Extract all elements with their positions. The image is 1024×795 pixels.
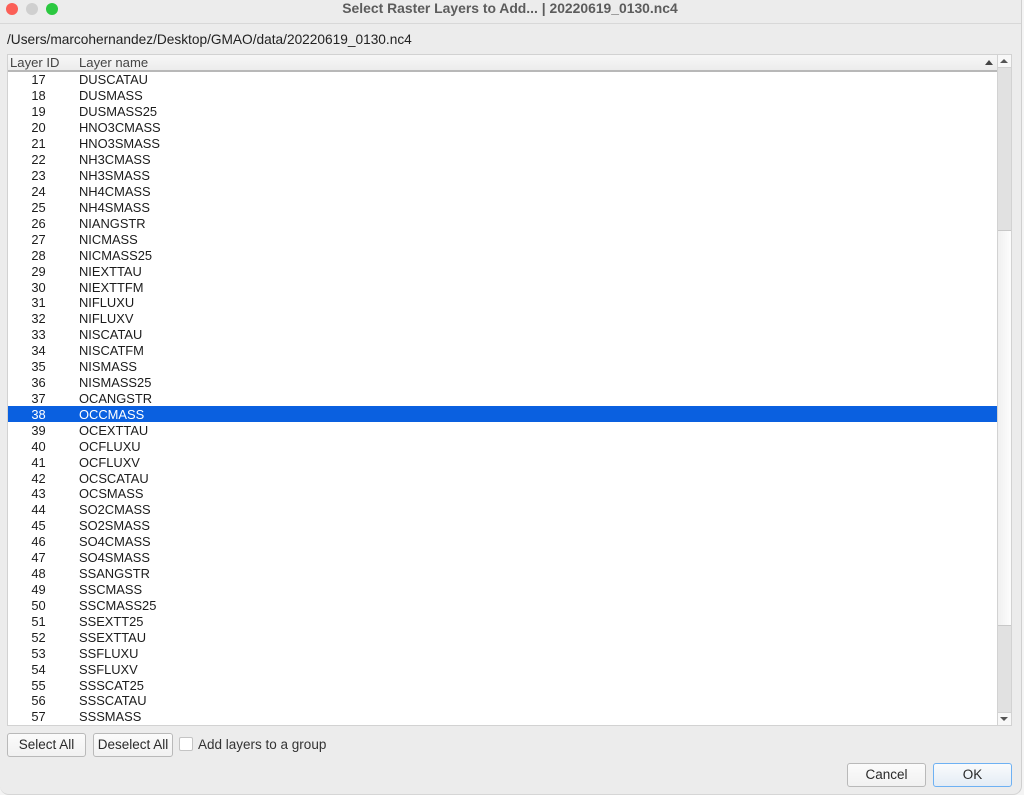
window title: Select Raster Layers to Add... | 20220619_0130.nc4	[342, 0, 678, 16]
table rows: 50	[31, 598, 46, 613]
table rows: 53	[31, 646, 46, 661]
table rows: 32	[31, 311, 46, 326]
table rows: 51	[31, 614, 46, 629]
table rows: DUSCATAU	[79, 72, 148, 87]
table rows: NH3CMASS	[79, 152, 151, 167]
table rows: 45	[31, 518, 46, 533]
table rows: NISMASS25	[79, 375, 151, 390]
table rows: 27	[31, 232, 46, 247]
column: Layer name: Layer name	[79, 55, 148, 70]
table rows: NIEXTTAU	[79, 264, 142, 279]
table rows: 17	[31, 72, 46, 87]
table rows: NISCATFM	[79, 343, 144, 358]
table rows: NH3SMASS	[79, 168, 150, 183]
button: OK	[933, 763, 1012, 787]
table rows: NIANGSTR	[79, 216, 146, 231]
table rows: SO4SMASS	[79, 550, 150, 565]
table rows: 28	[31, 248, 46, 263]
table rows: 52	[31, 630, 46, 645]
sort arrow	[985, 60, 993, 65]
table rows: 47	[31, 550, 46, 565]
table rows: 19	[31, 104, 46, 119]
table rows: 54	[31, 662, 46, 677]
window control: zoom	[46, 3, 58, 15]
table rows: SSEXTTAU	[79, 630, 146, 645]
checkbox	[179, 737, 193, 751]
table rows: 40	[31, 439, 46, 454]
button: OK: OK	[963, 767, 982, 782]
table rows: 49	[31, 582, 46, 597]
table rows: 37	[31, 391, 46, 406]
selected row: 38	[31, 407, 46, 422]
button: Deselect All: Deselect All	[98, 737, 168, 752]
table rows: SSCMASS25	[79, 598, 156, 613]
table rows: 48	[31, 566, 46, 581]
table rows: NH4SMASS	[79, 200, 150, 215]
table rows: 57	[31, 709, 46, 724]
table rows: 35	[31, 359, 46, 374]
table rows: NIEXTTFM	[79, 280, 143, 295]
checkbox label: Add layers to a group	[198, 737, 326, 752]
table rows: HNO3SMASS	[79, 136, 160, 151]
table rows: 24	[31, 184, 46, 199]
table rows: 21	[31, 136, 46, 151]
column: Layer ID: Layer ID	[10, 55, 60, 70]
window control: minimize	[26, 3, 38, 15]
button: Select All	[7, 733, 86, 757]
table rows: SSSMASS	[79, 709, 141, 724]
table rows: 36	[31, 375, 46, 390]
scroll up button	[998, 55, 1011, 68]
table rows: SSSCAT25	[79, 678, 144, 693]
table rows: SSANGSTR	[79, 566, 150, 581]
table rows: SO2SMASS	[79, 518, 150, 533]
table rows: SSEXTT25	[79, 614, 143, 629]
table rows: OCFLUXU	[79, 439, 141, 454]
table rows: SSFLUXU	[79, 646, 138, 661]
table rows: 56	[31, 693, 46, 708]
title bar	[0, 0, 1021, 24]
window control: close	[6, 3, 18, 15]
table rows: 25	[31, 200, 46, 215]
table rows: OCANGSTR	[79, 391, 152, 406]
table rows: 31	[31, 295, 46, 310]
table rows: SSSCATAU	[79, 693, 147, 708]
table rows: NH4CMASS	[79, 184, 151, 199]
table rows: 18	[31, 88, 46, 103]
scroll down button	[998, 712, 1011, 725]
table rows: 43	[31, 486, 46, 501]
selected row	[8, 406, 997, 422]
button: Cancel: Cancel	[865, 767, 908, 782]
table rows: OCEXTTAU	[79, 423, 148, 438]
table rows: 22	[31, 152, 46, 167]
table header	[8, 55, 997, 72]
table rows: OCFLUXV	[79, 455, 140, 470]
table rows: SO2CMASS	[79, 502, 151, 517]
table rows: NIFLUXV	[79, 311, 133, 326]
table rows: 34	[31, 343, 46, 358]
vertical scrollbar	[997, 55, 1011, 725]
file path: /Users/marcohernandez/Desktop/GMAO/data/20220619_0130.nc4	[7, 32, 412, 47]
table rows: NIFLUXU	[79, 295, 134, 310]
table rows: 46	[31, 534, 46, 549]
table rows: DUSMASS	[79, 88, 143, 103]
table rows: 39	[31, 423, 46, 438]
button: Cancel	[847, 763, 926, 787]
button: Select All: Select All	[19, 737, 74, 752]
selected row: OCCMASS	[79, 407, 144, 422]
table rows: 30	[31, 280, 46, 295]
table rows: 20	[31, 120, 46, 135]
table rows: 23	[31, 168, 46, 183]
table rows: 29	[31, 264, 46, 279]
table rows: NISMASS	[79, 359, 137, 374]
button: Deselect All	[93, 733, 173, 757]
table rows: NICMASS25	[79, 248, 152, 263]
table rows: 55	[31, 678, 46, 693]
table rows: OCSMASS	[79, 486, 143, 501]
table rows: SSCMASS	[79, 582, 142, 597]
table rows: NICMASS	[79, 232, 138, 247]
table rows: OCSCATAU	[79, 471, 149, 486]
scroll thumb	[998, 230, 1011, 626]
table rows: NISCATAU	[79, 327, 142, 342]
table rows: DUSMASS25	[79, 104, 157, 119]
table rows: SSFLUXV	[79, 662, 138, 677]
table rows: 33	[31, 327, 46, 342]
table rows: 41	[31, 455, 46, 470]
table rows: 42	[31, 471, 46, 486]
table rows: 26	[31, 216, 46, 231]
table rows: 44	[31, 502, 46, 517]
table rows: HNO3CMASS	[79, 120, 161, 135]
table rows	[8, 72, 997, 724]
table rows: SO4CMASS	[79, 534, 151, 549]
